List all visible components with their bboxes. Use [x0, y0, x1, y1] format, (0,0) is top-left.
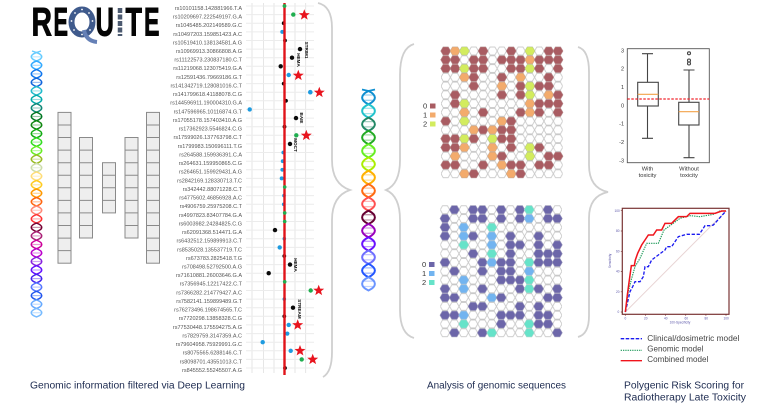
chart: ROC curves — [608, 208, 729, 324]
caption: polygenic risk scoring — [624, 380, 746, 404]
brace: heatmaps to risk scoring — [578, 47, 608, 337]
curve: combined model — [625, 211, 726, 312]
SNP identifier labels: rs6432512.159899913.C.T — [177, 239, 243, 245]
SNP identifier labels: rs673783.2825418.T.G — [186, 256, 242, 262]
ROC tick labels: 80 — [616, 229, 620, 233]
y axis tick labels: 1 — [621, 85, 624, 91]
SNP identifier labels: rs62091368.514471.G.A — [182, 230, 242, 236]
ROC tick labels: 100 — [614, 209, 620, 213]
SNP identifier labels: rs71610881.26003646.G.A — [176, 273, 242, 279]
SNP identifier labels: rs4997823.83407784.G.A — [179, 213, 242, 219]
icon: rainbow DNA helix, centre — [362, 90, 375, 290]
caption: polygenic risk scoring: Radiotherapy Late Toxicity — [624, 392, 746, 404]
ROC tick labels: 20 — [644, 316, 648, 320]
green dots — [283, 4, 313, 362]
SNP identifier labels: rs79604958.75929991.G.C — [176, 342, 242, 348]
SNP identifier labels: rs141799618.41188078.C.G — [173, 92, 242, 98]
SNP identifier labels: rs11219068.123075419.G.A — [173, 66, 242, 72]
SNP identifier labels: rs264651.159929431.A.G — [179, 170, 242, 176]
y axis tick labels: 3 — [621, 48, 624, 54]
SNP identifier labels: rs7366282.214779427.A.C — [176, 290, 242, 296]
SNP identifier labels: rs4906759.25975208.C.T — [180, 204, 243, 210]
SNP identifier labels: rs8098701.43551013.C.T — [180, 359, 243, 365]
legend: bottom heatmap: 0 — [422, 260, 426, 269]
SNP identifier labels: rs144596911.190004310.G.A — [170, 101, 242, 107]
heatmap: top genomic sequences — [441, 47, 563, 178]
gene labels — [293, 42, 309, 319]
SNP identifier labels: rs76273496.198674565.T.C — [174, 308, 242, 314]
SNP identifier labels: rs4775602.46856928.A.C — [179, 196, 242, 202]
SNP identifier labels: rs708498.52792500.A.G — [182, 264, 242, 270]
logo: REQUITE: U — [96, 1, 114, 45]
y axis tick labels — [619, 48, 624, 164]
legend: bottom heatmap: 1 — [422, 269, 426, 278]
SNP identifier labels: rs342442.88071228.C.T — [183, 187, 243, 193]
x axis labels — [639, 166, 699, 179]
y axis tick labels: 0 — [621, 103, 624, 109]
chart: box plot of risk score by toxicity — [619, 48, 709, 179]
SNP effect dot plot — [246, 3, 325, 375]
ROC tick labels: 0 — [624, 316, 626, 320]
logo: REQUITE: T — [126, 1, 142, 45]
legend: bottom heatmap: 2 — [422, 278, 426, 287]
ROC tick labels — [608, 209, 729, 324]
SNP identifier labels: rs6003982.24284825.C.G — [179, 221, 242, 227]
SNP identifier labels: rs7829759.3147359.A.C — [182, 334, 242, 340]
SNP identifier labels: rs10101158.142881966.T.A — [175, 6, 242, 12]
y axis tick labels: 2 — [621, 67, 624, 73]
ROC tick labels: 20 — [616, 290, 620, 294]
logo: REQUITE: E — [144, 1, 160, 45]
gene labels: STRIM1 — [304, 42, 309, 59]
legend: top heatmap: 1 — [423, 110, 427, 120]
ROC tick labels: 60 — [684, 316, 688, 320]
blue dots — [248, 30, 313, 353]
SNP identifier labels: rs1045485.202149589.G.C — [176, 23, 242, 29]
caption: genomic information: Genomic information filtered via Deep Learning — [30, 380, 245, 392]
red stars — [292, 9, 325, 364]
gene labels: HEMA — [296, 53, 301, 67]
SNP identifier labels: rs8535028.135537719.T.C — [177, 247, 242, 253]
heatmap: bottom genomic sequences — [440, 205, 562, 337]
SNP identifier labels: rs17055178.157403410.A.G — [173, 118, 242, 124]
logo: REQUITE: E — [54, 1, 68, 45]
SNP identifier labels: rs264588.159936391.C.A — [179, 152, 242, 158]
ROC tick labels: Sensitivity — [608, 253, 612, 268]
ROC tick labels: 40 — [664, 316, 668, 320]
SNP identifier labels: rs1799983.150696111.T.G — [178, 144, 242, 150]
ROC tick labels: 0 — [618, 310, 620, 314]
box: with toxicity — [638, 54, 658, 138]
caption: polygenic risk scoring: Polygenic Risk Scoring for — [624, 380, 745, 392]
ROC tick labels: 60 — [616, 250, 620, 254]
y axis tick labels: -2 — [619, 140, 624, 146]
legend: bottom heatmap — [422, 260, 434, 287]
SNP identifier labels: rs7582141.159899489.G.T — [176, 299, 243, 305]
brace: central DNA to heatmaps — [386, 44, 414, 338]
logo: REQUITE — [32, 1, 160, 45]
red reference line — [283, 3, 286, 375]
SNP identifier labels: rs11122573.230837180.C.T — [174, 58, 243, 64]
ROC tick labels: 100-Specificity — [670, 320, 691, 324]
SNP identifier labels: rs7356945.12217422.C.T — [180, 282, 243, 288]
y axis tick labels: -3 — [619, 158, 624, 164]
SNP identifier labels: rs7720298.13858328.C.G — [179, 316, 242, 322]
SNP identifier labels: rs77530448.175594275.A.G — [173, 325, 242, 331]
SNP identifier labels: rs141342719.128081016.C.T — [170, 84, 243, 90]
curve: clinical model — [625, 211, 726, 312]
SNP identifier labels: rs10497203.159851423.A.C — [173, 32, 242, 38]
SNP identifier labels: rs10519410.138134581.A.G — [173, 40, 242, 46]
legend: ROC models: Genomic model — [647, 344, 704, 354]
legend: top heatmap — [423, 102, 436, 128]
SNP identifier labels — [170, 6, 243, 374]
SNP identifier labels: rs2842169.128330713.T.C — [177, 178, 242, 184]
SNP identifier labels: rs10969913.30866808.A.G — [176, 49, 242, 55]
logo: REQUITE: R — [32, 1, 52, 45]
threshold line — [627, 98, 709, 100]
brace: SNP list to central DNA — [318, 3, 350, 377]
box: without toxicity — [679, 52, 699, 158]
legend: top heatmap: 2 — [423, 120, 427, 128]
caption: analysis of sequences: Analysis of genomic sequences — [427, 380, 566, 392]
gene labels: BAIE — [299, 113, 304, 123]
icon: rainbow DNA helix, left — [31, 1, 42, 317]
SNP identifier labels: rs17599026.137763798.C.T — [174, 135, 243, 141]
ROC tick labels: 100 — [724, 316, 729, 320]
black dots — [266, 21, 302, 370]
y axis tick labels: -1 — [619, 122, 624, 128]
legend: ROC models: Combined model — [647, 355, 709, 364]
gene labels: MOCT — [293, 138, 298, 152]
legend: top heatmap: 0 — [423, 102, 427, 110]
SNP identifier labels: rs12591436.79669186.G.T — [176, 75, 243, 81]
neural network layers of boxes — [58, 112, 160, 263]
SNP identifier labels: rs147596965.10116874.G.T — [174, 109, 243, 115]
SNP identifier labels: rs8075565.6288146.C.T — [183, 351, 243, 357]
ROC tick labels: 40 — [616, 270, 620, 274]
SNP identifier labels: rs17362923.5546824.C.G — [179, 127, 242, 133]
gene labels: STREAM — [297, 299, 302, 319]
SNP identifier labels: rs264631.159950865.C.G — [179, 161, 242, 167]
legend: ROC models — [621, 334, 740, 364]
x axis labels: toxicity — [680, 173, 698, 179]
ROC tick labels: 80 — [704, 316, 708, 320]
x axis labels: Without — [679, 166, 699, 172]
SNP identifier labels: rs10209697.222549197.G.A — [173, 14, 242, 20]
x axis labels: toxicity — [639, 173, 656, 179]
SNP identifier labels: rs845552.55245507.A.G — [182, 368, 242, 374]
x axis labels: With — [642, 166, 653, 172]
legend: ROC models: Clinical/dosimetric model — [647, 334, 740, 343]
gene labels: HEMA — [293, 258, 298, 272]
curve: genomic model — [625, 211, 726, 312]
